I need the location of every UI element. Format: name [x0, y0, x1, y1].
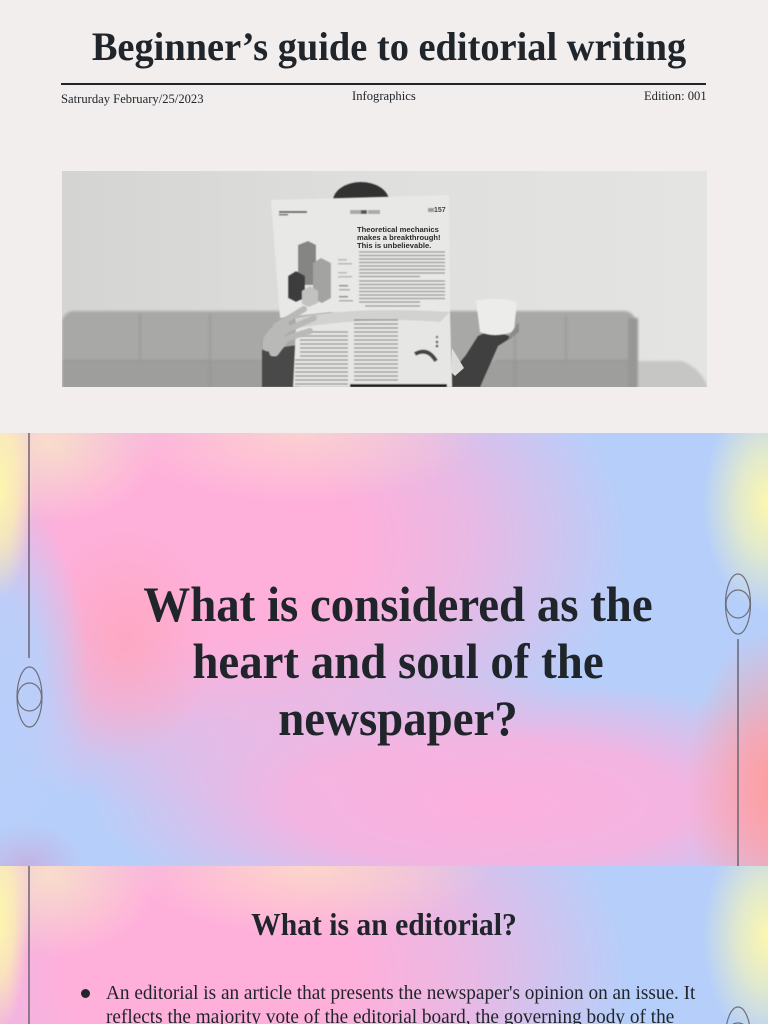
newspaper [271, 195, 452, 387]
article lines lower [354, 320, 398, 380]
body text: An editorial is an article that presents the newspaper's opinion on an issue. It [106, 982, 695, 1004]
wall [62, 171, 707, 387]
newspaper headline [357, 225, 441, 250]
left hand [268, 309, 314, 352]
header rule [61, 83, 706, 85]
bar graphic [298, 241, 316, 285]
date: Satrurday February/25/2023 [61, 91, 204, 106]
icon: left rings [16, 666, 43, 728]
body text [106, 982, 696, 1024]
left vertical line [28, 433, 30, 658]
title: Beginner’s guide to editorial writing [92, 24, 686, 69]
panel: what is considered heart and soul [0, 433, 768, 866]
big question [143, 576, 653, 746]
photo: person reading newspaper on sofa [62, 171, 707, 387]
gauge [415, 352, 436, 361]
big question: newspaper? [278, 690, 518, 746]
big question: What is considered as the [143, 576, 653, 632]
masthead [279, 208, 434, 216]
mug [476, 299, 519, 340]
icon: right rings [726, 1006, 750, 1024]
article lines upper [359, 252, 445, 306]
newspaper headline: This is unbelievable. [357, 241, 431, 250]
icon: right rings [724, 573, 752, 635]
header [61, 24, 707, 106]
right vertical line [737, 639, 739, 866]
side notes [338, 259, 353, 302]
newspaper headline: makes a breakthrough! [357, 233, 441, 242]
panel: what is an editorial [0, 866, 768, 1024]
right sleeve [452, 330, 512, 387]
newspaper number: 157 [434, 207, 446, 214]
bullet [81, 989, 90, 998]
heading: What is an editorial? [251, 907, 517, 942]
newspaper headline: Theoretical mechanics [357, 225, 439, 234]
left vertical line [28, 866, 30, 1024]
left sleeve [262, 345, 300, 387]
edition: Edition: 001 [644, 88, 707, 103]
sofa [62, 311, 709, 391]
section label: Infographics [352, 88, 416, 103]
big question: heart and soul of the [192, 633, 604, 689]
head [333, 182, 389, 220]
